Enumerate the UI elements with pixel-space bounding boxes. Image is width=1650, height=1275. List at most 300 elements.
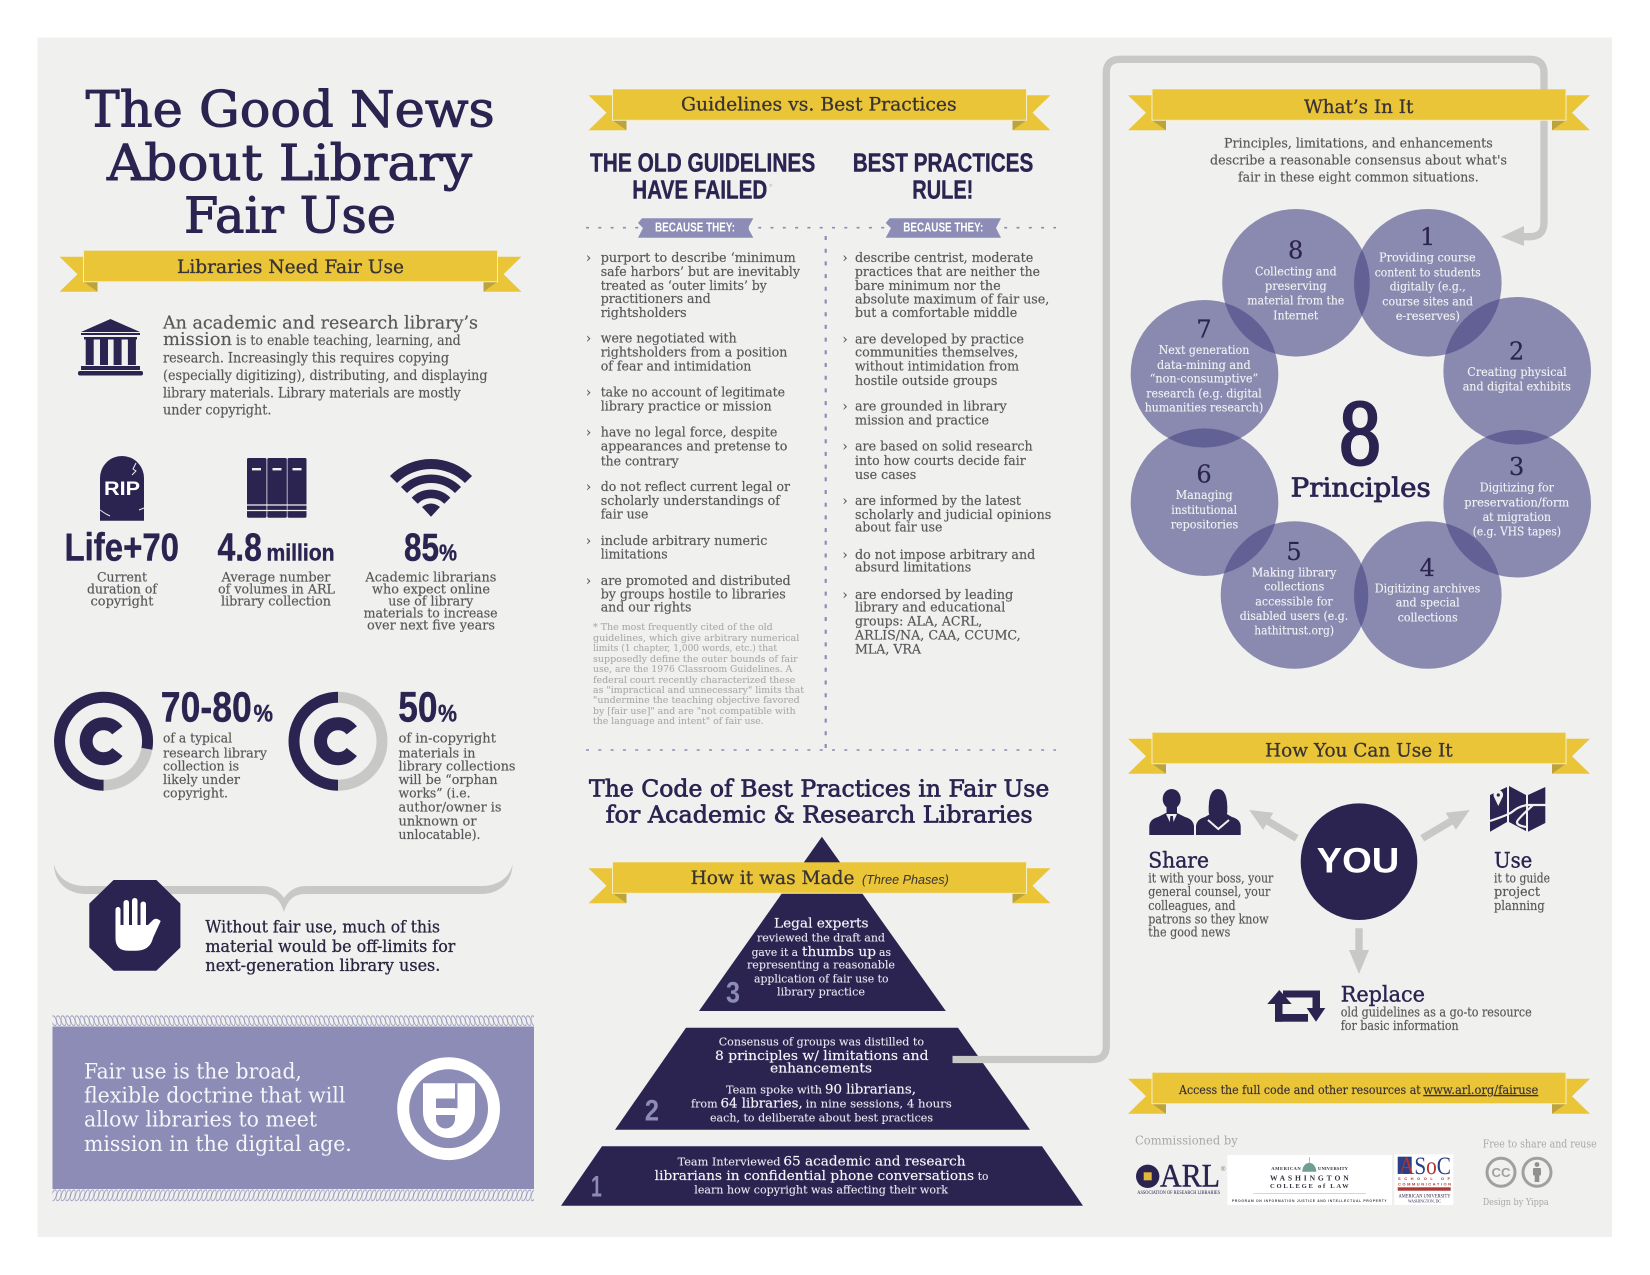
text: mission xyxy=(162,312,488,418)
list: old guidelines: › xyxy=(586,386,591,401)
list: old guidelines: › xyxy=(586,426,591,441)
logo: Washington College of Law: WASHINGTON xyxy=(1270,1174,1349,1183)
principle 7: humanities research) xyxy=(1145,401,1263,415)
pyramid tier 3: application of fair use to xyxy=(754,972,889,986)
stat: 70-80%: % xyxy=(254,701,273,728)
text: mission: library materials. Library materials are mostly xyxy=(163,385,461,401)
pyramid tier 2: in nine sessions, 4 hours xyxy=(806,1097,952,1111)
pyramid tier 1 xyxy=(561,1146,1083,1206)
pyramid tier 2: Consensus of groups was distilled to xyxy=(719,1035,924,1049)
list: best practices: but a comfortable middle xyxy=(855,306,1017,321)
text: replace: old guidelines as a go-to resource xyxy=(1341,1005,1532,1020)
text: use: it to guide xyxy=(1494,870,1550,885)
principle 5: Making library xyxy=(1252,566,1337,580)
stat: 70-80%: of a typical xyxy=(163,732,232,747)
text: mission: (especially digitizing), distributing, and displaying xyxy=(163,368,488,384)
pyramid tier 1: Team Interviewed xyxy=(678,1155,781,1169)
stat: Life+70: duration of xyxy=(87,582,158,597)
list: best practices: into how courts decide fair xyxy=(855,454,1027,469)
pyramid tier 2: 2 xyxy=(645,1095,659,1128)
logo: Washington College of Law: COLLEGE of LAW xyxy=(1270,1183,1349,1190)
footnote: the language and intent" of fair use. xyxy=(593,716,764,727)
principle 5 xyxy=(1240,538,1348,638)
icon: copyright ring 70-80 xyxy=(60,697,148,785)
principle 1: e-reserves) xyxy=(1396,309,1460,323)
pyramid tier 1: to xyxy=(978,1169,988,1183)
list: best practices: communities themselves, xyxy=(855,346,1018,361)
title: The Good News xyxy=(86,81,495,139)
pyramid tier 1: librarians in confidential phone conversations xyxy=(655,1169,974,1184)
list: old guidelines: limitations xyxy=(601,547,668,562)
text: use: Use xyxy=(1494,848,1532,873)
stat: 50% xyxy=(294,684,516,843)
ribbon: How it was Made: How it was Made xyxy=(691,867,854,889)
list: old guidelines: treated as ‘outer limits’ by xyxy=(601,279,767,294)
credits: commissioned by: Commissioned by xyxy=(1135,1133,1238,1147)
list: best practices: are developed by practice xyxy=(855,332,1024,347)
stat: 50%: works” (i.e. xyxy=(398,787,470,802)
list: old guidelines: take no account of legitimate xyxy=(601,386,785,401)
you circle: YOU xyxy=(1317,842,1399,881)
callout: fair use doctrine: mission in the digital age. xyxy=(84,1132,352,1156)
logo: Washington College of Law: UNIVERSITY xyxy=(1318,1166,1349,1171)
list: old guidelines: appearances and pretense to xyxy=(601,440,788,455)
ribbon: access link: Access the full code and other resources at xyxy=(1178,1083,1421,1097)
text: share: the good news xyxy=(1148,925,1230,940)
principle 7: data-mining and xyxy=(1157,358,1251,372)
list: old guidelines: › xyxy=(586,574,591,589)
icon: tombstone: RIP xyxy=(104,479,140,500)
list: old guidelines: rightsholders xyxy=(601,306,687,321)
list: old guidelines: by groups hostile to libraries xyxy=(601,587,786,602)
stat: 85%: over next five years xyxy=(367,619,495,634)
principle 6: 6 xyxy=(1196,461,1212,489)
pyramid tier 2 xyxy=(615,1028,1030,1130)
list: best practices: are informed by the latest xyxy=(855,494,1022,509)
stat: Life+70: Current xyxy=(97,571,148,586)
arrow: you to use xyxy=(1420,810,1470,842)
panel: guidelines vs best practices xyxy=(586,89,1056,829)
stat: 50%: library collections xyxy=(398,760,516,775)
footnote: supposedly define the outer bounds of fair xyxy=(593,654,798,665)
heading: best practices xyxy=(853,150,1033,204)
pyramid tier 1: 1 xyxy=(591,1171,602,1204)
logo: School of Communication: ASoC xyxy=(1399,1153,1451,1180)
icon: creative commons: CC xyxy=(1492,1165,1511,1180)
pyramid tier 2: 90 librarians, xyxy=(825,1082,916,1097)
list: best practices: practices that are neither the xyxy=(855,265,1040,280)
principle 3: Digitizing for xyxy=(1480,481,1554,495)
icon: tombstone xyxy=(100,456,144,521)
text: mission: under copyright. xyxy=(163,402,271,418)
text: share: general counsel, your xyxy=(1148,884,1271,899)
list: old guidelines: and our rights xyxy=(601,601,691,616)
text: share xyxy=(1148,848,1274,940)
tag: because they left xyxy=(638,218,753,238)
list: old guidelines: have no legal force, despite xyxy=(601,426,777,441)
principle 5: accessible for xyxy=(1255,595,1333,609)
panel: left column xyxy=(52,81,534,1202)
text: replace: Replace xyxy=(1341,983,1425,1008)
list: best practices: ARLIS/NA, CAA, CCUMC, xyxy=(854,628,1021,643)
logo: Washington College of Law xyxy=(1227,1155,1392,1205)
ribbon: access link: www.arl.org/fairuse xyxy=(1423,1083,1538,1097)
principle 1: 1 xyxy=(1420,223,1435,251)
center label: 8 Principles: Principles xyxy=(1291,473,1431,504)
list: old guidelines: › xyxy=(586,480,591,495)
stat: 85%: materials to increase xyxy=(364,607,498,622)
list: best practices: MLA, VRA xyxy=(855,642,922,657)
principle 3: at migration xyxy=(1483,510,1551,524)
ribbon: Guidelines vs. Best Practices: Guidelines vs. Best Practices xyxy=(681,94,957,116)
logo: School of Communication: SCHOOL OF xyxy=(1398,1176,1451,1181)
center label: 8 Principles xyxy=(1291,387,1431,504)
heading: old guidelines: HAVE FAILED xyxy=(632,176,767,204)
list: best practices xyxy=(842,251,1051,657)
list: best practices: scholarly and judicial opinions xyxy=(855,508,1051,523)
text: share: Share xyxy=(1148,848,1209,873)
ribbon: Libraries Need Fair Use: Libraries Need Fair Use xyxy=(177,256,404,278)
stat: 4.8 million: library collection xyxy=(221,595,332,610)
pyramid tier 1: 65 academic and research xyxy=(783,1155,966,1170)
callout: fair use doctrine: allow libraries to meet xyxy=(84,1108,318,1132)
chart: eight principle circles xyxy=(1131,209,1591,669)
footnote: guidelines, which give arbitrary numerical xyxy=(593,633,799,644)
panel: what's in it xyxy=(1128,89,1591,669)
list: best practices: › xyxy=(842,588,848,603)
stat: 50%: author/owner is xyxy=(398,801,502,816)
footnote: federal court recently characterized these xyxy=(593,675,796,686)
principle 5: disabled users (e.g. xyxy=(1240,609,1348,623)
center label: 8 Principles: 8 xyxy=(1338,387,1382,484)
title xyxy=(86,81,495,245)
footnote: "undermine the teaching objective favored xyxy=(593,695,800,706)
text: without fair use: Without fair use, much of this xyxy=(205,918,440,937)
principle 7: “non-consumptive” xyxy=(1150,372,1258,386)
pyramid tier 1: learn how copyright was affecting their work xyxy=(694,1182,949,1196)
principle 3: (e.g. VHS tapes) xyxy=(1473,525,1561,539)
principle 4: collections xyxy=(1398,611,1458,625)
callout: fair use doctrine: flexible doctrine that will xyxy=(84,1084,346,1108)
logo: ARL: ® xyxy=(1221,1166,1226,1173)
principle 7: research (e.g. digital xyxy=(1146,387,1262,401)
stat: 50%: % xyxy=(438,701,457,728)
principle 7 xyxy=(1145,315,1263,415)
pyramid tier 2: 8 principles w/ limitations and xyxy=(715,1049,929,1064)
text: mission: An academic and research library’s xyxy=(162,312,478,333)
pyramid tier 2: enhancements xyxy=(770,1062,872,1077)
principle 6: repositories xyxy=(1171,517,1238,531)
title: About Library xyxy=(106,134,473,192)
text: mission: is to enable teaching, learning, and xyxy=(236,333,461,349)
panel: how you can use it xyxy=(1128,733,1590,1033)
heading: best practices: BEST PRACTICES xyxy=(853,150,1033,178)
principle 7: Next generation xyxy=(1159,343,1250,357)
text: replace: for basic information xyxy=(1341,1018,1459,1033)
list: old guidelines: scholarly understandings of xyxy=(601,494,781,509)
text: intro: Principles, limitations, and enhancements xyxy=(1224,136,1493,151)
list: old guidelines: do not reflect current legal or xyxy=(601,480,791,495)
arrow: connector from pyramid to What's In It xyxy=(952,59,1544,1060)
principle 5: hathitrust.org) xyxy=(1254,624,1334,638)
logo: School of Communication: AMERICAN UNIVERSITY xyxy=(1398,1194,1451,1200)
pyramid tier 3: 3 xyxy=(726,977,740,1010)
principle 5: collections xyxy=(1264,580,1324,594)
list: best practices: mission and practice xyxy=(855,414,989,429)
logo: School of Communication: WASHINGTON, DC xyxy=(1408,1200,1441,1205)
principle 4 xyxy=(1375,554,1480,625)
text: without fair use xyxy=(205,918,456,975)
stat: 70-80%: 70-80 xyxy=(161,684,252,732)
list: old guidelines: are promoted and distributed xyxy=(601,574,791,589)
logo: Washington College of Law: PROGRAM ON INFORMATION JUSTICE AND INTELLECTUAL PROPERTY xyxy=(1232,1199,1387,1203)
stat: 85%: 85 xyxy=(404,527,439,570)
ribbon: How You Can Use It: How You Can Use It xyxy=(1265,740,1453,762)
list: old guidelines: › xyxy=(586,534,591,549)
heading: code of best practices xyxy=(589,775,1049,829)
list: old guidelines: › xyxy=(586,251,591,266)
text: share: it with your boss, your xyxy=(1148,870,1274,885)
pyramid tier 2: each, to deliberate about best practices xyxy=(710,1111,933,1125)
stat: Life+70 xyxy=(64,456,179,610)
principle 3: preservation/form xyxy=(1464,496,1569,510)
stat: 4.8 million xyxy=(218,458,335,610)
stat: 70-80%: copyright. xyxy=(163,787,228,802)
list: best practices: › xyxy=(842,548,848,563)
footnote: use, are the 1976 Classroom Guidelines. A xyxy=(593,664,793,675)
title: Fair Use xyxy=(184,187,396,245)
list: best practices: about fair use xyxy=(855,521,942,536)
ribbon: Libraries Need Fair Use xyxy=(60,251,522,292)
pyramid tier 3: Legal experts xyxy=(774,917,869,932)
principle 2: Creating physical xyxy=(1467,365,1567,379)
pyramid tier 2: from xyxy=(691,1097,718,1111)
ribbon: What's In It xyxy=(1128,89,1590,130)
principle 7: 7 xyxy=(1196,315,1212,343)
tag: because they left: BECAUSE THEY: xyxy=(655,220,735,235)
pyramid tier 3: reviewed the draft and xyxy=(757,931,886,945)
heading: old guidelines xyxy=(590,150,815,204)
stat: 50%: unlocatable). xyxy=(398,828,480,843)
list: best practices: bare minimum nor the xyxy=(855,279,1001,294)
pyramid tier 3: gave it a xyxy=(752,945,798,959)
text: share: patrons so they know xyxy=(1148,911,1269,926)
text: replace xyxy=(1341,983,1532,1033)
stat: 70-80%: collection is xyxy=(163,760,239,775)
stat: 85%: % xyxy=(439,540,457,566)
list: best practices: groups: ALA, ACRL, xyxy=(855,615,982,630)
footnote: * The most frequently cited of the old xyxy=(593,622,773,633)
pyramid tier 3: as xyxy=(879,945,891,959)
logo: ARL: ARL xyxy=(1160,1159,1220,1195)
icon: stop hand xyxy=(90,881,179,970)
heading: old guidelines: THE OLD GUIDELINES xyxy=(590,150,815,178)
principle 6: institutional xyxy=(1171,503,1237,517)
list: best practices: hostile outside groups xyxy=(855,374,997,389)
principle 8: material from the xyxy=(1247,293,1344,307)
icon: copyright ring 50 xyxy=(294,697,382,785)
principle 2: and digital exhibits xyxy=(1463,380,1571,394)
stat: 70-80%: research library xyxy=(163,746,268,761)
footnote: by [fair use]" and are "not compatible with xyxy=(593,706,796,717)
stat: 50%: will be “orphan xyxy=(398,773,498,788)
list: old guidelines: library practice or mission xyxy=(601,400,772,415)
heading: code of best practices: for Academic & Research Libraries xyxy=(606,801,1033,829)
principle 6 xyxy=(1171,461,1238,531)
icon: wifi xyxy=(394,464,468,517)
list: best practices: library and educational xyxy=(855,601,1005,616)
pyramid tier 3 xyxy=(699,837,946,1011)
list: best practices: › xyxy=(842,440,848,455)
principle 1: course sites and xyxy=(1382,295,1473,309)
pyramid tier 3: library practice xyxy=(777,985,865,999)
ribbon: What's In It: What’s In It xyxy=(1304,96,1414,118)
principle 1 xyxy=(1375,223,1481,323)
principle 1: content to students xyxy=(1375,266,1481,280)
credits: license: Free to share and reuse xyxy=(1483,1138,1597,1151)
brace xyxy=(54,864,512,912)
pyramid tier 2: Team spoke with xyxy=(726,1082,823,1096)
list: best practices: › xyxy=(842,400,848,415)
stat: 85%: who expect online xyxy=(372,582,490,597)
ribbon: How it was Made xyxy=(588,862,1050,903)
ribbon: access link xyxy=(1128,1073,1590,1114)
credits: license xyxy=(1483,1138,1597,1208)
stat: 85%: use of library xyxy=(388,595,474,610)
list: best practices: absolute maximum of fair use, xyxy=(855,292,1049,308)
logo: School of Communication xyxy=(1394,1153,1453,1205)
stat: 50%: of in-copyright xyxy=(398,732,497,747)
text: intro: describe a reasonable consensus about what's xyxy=(1210,153,1507,168)
text: use: planning xyxy=(1494,898,1545,913)
principle 3: 3 xyxy=(1509,453,1524,481)
ribbon: How You Can Use It xyxy=(1128,733,1590,774)
principle 2 xyxy=(1463,337,1571,394)
principle 8: Internet xyxy=(1273,308,1319,322)
text: mission: mission xyxy=(163,329,232,350)
list: old guidelines xyxy=(586,251,801,616)
text: use xyxy=(1494,848,1550,913)
text: without fair use: next-generation library uses. xyxy=(205,956,440,975)
list: old guidelines: practitioners and xyxy=(601,292,711,307)
list: best practices: › xyxy=(842,494,848,509)
stat: Life+70: copyright xyxy=(90,595,154,610)
stat: Life+70: Life+70 xyxy=(64,527,179,570)
stat: 50%: 50 xyxy=(398,684,438,732)
list: old guidelines: were negotiated with xyxy=(601,332,737,347)
stat: 4.8 million: 4.8 xyxy=(218,527,262,570)
stat: 70-80% xyxy=(60,684,273,802)
list: old guidelines: › xyxy=(586,332,591,347)
stat: 85% xyxy=(364,464,498,634)
principle 4: Digitizing archives xyxy=(1375,582,1480,596)
tag: because they right: BECAUSE THEY: xyxy=(903,220,983,235)
principle 5: 5 xyxy=(1286,538,1302,566)
principle 8: 8 xyxy=(1288,236,1303,264)
tag: because they right xyxy=(886,218,1001,238)
stat: 4.8 million: of volumes in ARL xyxy=(218,582,335,597)
stat: 4.8 million: million xyxy=(266,540,334,566)
pyramid tier 2: 64 libraries, xyxy=(720,1097,803,1112)
principle 2: 2 xyxy=(1509,337,1524,365)
stat: 70-80%: likely under xyxy=(163,773,241,788)
pyramid tier 3: thumbs up xyxy=(802,945,876,960)
credits: license: Design by Yippa xyxy=(1483,1197,1549,1208)
list: old guidelines: of fear and intimidation xyxy=(601,360,751,375)
principle 4: 4 xyxy=(1420,554,1435,582)
stat: 50%: unknown or xyxy=(398,815,477,830)
list: best practices: › xyxy=(842,332,848,347)
principle 8: preserving xyxy=(1265,279,1327,293)
text: intro: fair in these eight common situations. xyxy=(1238,170,1479,185)
arrow: you to replace xyxy=(1349,928,1369,974)
panel: pyramid xyxy=(561,837,1083,1206)
logo: Washington College of Law: AMERICAN xyxy=(1271,1166,1301,1171)
icon: books xyxy=(247,458,306,518)
list: old guidelines: fair use xyxy=(601,507,648,522)
icon: library building xyxy=(78,319,143,376)
stat: 85%: Academic librarians xyxy=(364,571,496,586)
ribbon: Guidelines vs. Best Practices xyxy=(588,89,1050,130)
principle 1: Providing course xyxy=(1379,251,1476,265)
heading: code of best practices: The Code of Best Practices in Fair Use xyxy=(589,775,1049,803)
list: best practices: without intimidation from xyxy=(855,360,1019,375)
text: without fair use: material would be off-limits for xyxy=(205,937,456,956)
list: best practices: do not impose arbitrary and xyxy=(855,548,1035,563)
stat: 50%: materials in xyxy=(398,746,476,761)
credits: commissioned by xyxy=(1135,1133,1453,1205)
list: best practices: use cases xyxy=(855,468,916,483)
text: share: colleagues, and xyxy=(1148,898,1236,913)
list: best practices: describe centrist, moderate xyxy=(855,251,1033,266)
callout: fair use doctrine: Fair use is the broad, xyxy=(84,1059,302,1083)
list: old guidelines: safe harbors’ but are inevitably xyxy=(601,265,801,280)
list: best practices: › xyxy=(842,251,848,266)
list: old guidelines: purport to describe ‘minimum xyxy=(601,251,796,266)
list: best practices: are based on solid research xyxy=(855,440,1033,455)
arrow: you to share xyxy=(1249,810,1299,842)
icon: replace arrows xyxy=(1267,990,1325,1022)
heading: best practices: RULE! xyxy=(912,176,973,204)
principle 8 xyxy=(1247,236,1344,322)
icon: map xyxy=(1490,786,1546,832)
principle 8: Collecting and xyxy=(1255,265,1337,279)
list: old guidelines: the contrary xyxy=(601,455,679,470)
icon: people xyxy=(1149,789,1241,835)
icon: FU logo xyxy=(403,1063,494,1154)
ribbon: How it was Made: (Three Phases) xyxy=(862,872,949,887)
heading: old guidelines: * xyxy=(769,182,773,192)
logo: School of Communication: COMMUNICATION xyxy=(1398,1182,1451,1186)
list: best practices: are endorsed by leading xyxy=(855,588,1013,603)
footnote xyxy=(593,622,804,727)
text: intro xyxy=(1210,136,1507,185)
text: mission: research. Increasingly this requires copying xyxy=(163,350,449,366)
logo: ARL: ASSOCIATION OF RESEARCH LIBRARIES xyxy=(1137,1190,1220,1196)
list: best practices: absurd limitations xyxy=(855,561,971,576)
principle 4: and special xyxy=(1396,596,1460,610)
list: old guidelines: include arbitrary numeric xyxy=(601,534,767,549)
you circle xyxy=(1301,803,1417,920)
principle 1: digitally (e.g., xyxy=(1390,280,1466,294)
list: best practices: are grounded in library xyxy=(855,400,1007,415)
stat: 4.8 million: Average number xyxy=(221,571,331,586)
callout: fair use doctrine xyxy=(52,1015,534,1202)
list: old guidelines: rightsholders from a position xyxy=(601,346,787,361)
footnote: limits (1 chapter, 1,000 words, etc.) that xyxy=(593,643,777,654)
footnote: as "impractical and unnecessary" limits that xyxy=(593,685,804,696)
principle 6: Managing xyxy=(1176,488,1233,502)
